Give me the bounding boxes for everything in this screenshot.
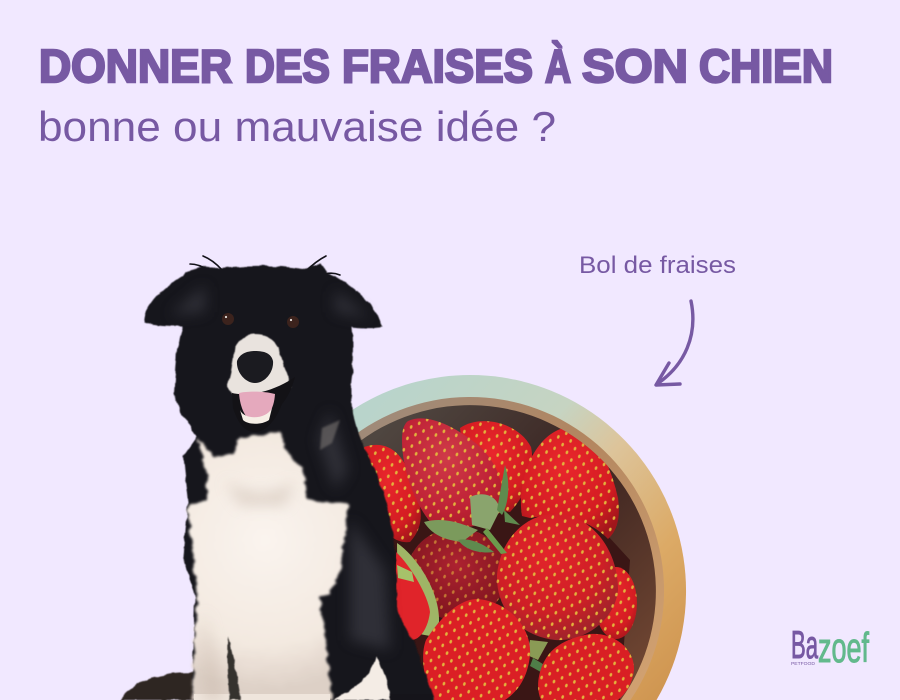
logo: Bazoef: Ba [791,624,818,667]
strawberry: right behind [595,567,637,639]
black coat and head silhouette [144,264,434,700]
subtitle: bonne ou mauvaise idée ? [38,103,556,150]
white neck streak [320,420,340,450]
label: bol de fraises: Bol de fraises [579,252,736,279]
bowl inner lip [340,397,664,700]
white paw patch [333,657,390,700]
mouth [232,377,295,432]
strawberry: center large [497,514,618,640]
strawberry: cut left [396,543,439,640]
white blaze and muzzle [227,334,291,398]
strawberry: bottom right [538,634,634,700]
coat sheen [170,285,390,650]
tongue [239,392,275,422]
left eye [222,313,234,325]
fur tufts on ears [190,256,340,276]
dark stripe between legs [227,636,241,700]
title: FRAISES [342,40,533,92]
photo: bowl of strawberries [340,375,686,700]
teeth [240,408,272,424]
arrow: pointing to bowl [656,301,693,385]
strawberries [360,418,637,700]
logo: Bazoef: PETFOOD [791,661,816,666]
title: DES [245,40,330,92]
right eye [287,316,299,328]
bowl inner wall [340,405,656,700]
coat bottom edge [196,694,432,700]
white chest [188,433,348,700]
dark fill behind berries [393,454,630,700]
strawberry: top pink [402,418,502,528]
strawberry: upper right [521,427,619,539]
strawberry: left [362,445,421,542]
title: SON [582,40,688,92]
logo: Bazoef: zoef [818,624,869,671]
tail [120,673,196,700]
photo: border collie dog [120,256,434,700]
title: DONNER [39,40,232,92]
strawberry: back top [460,421,532,512]
chest bottom edge [194,694,330,700]
title: À [545,40,571,92]
title: CHIEN [699,40,833,92]
leaves and stem [424,465,556,676]
strawberry: lower dark [411,532,502,618]
chest fur shadow [205,480,295,700]
logo: Bazoef [791,624,869,671]
nose [237,351,273,383]
title [39,40,833,92]
strawberry: lower middle [423,599,530,700]
bowl rim [340,375,686,700]
